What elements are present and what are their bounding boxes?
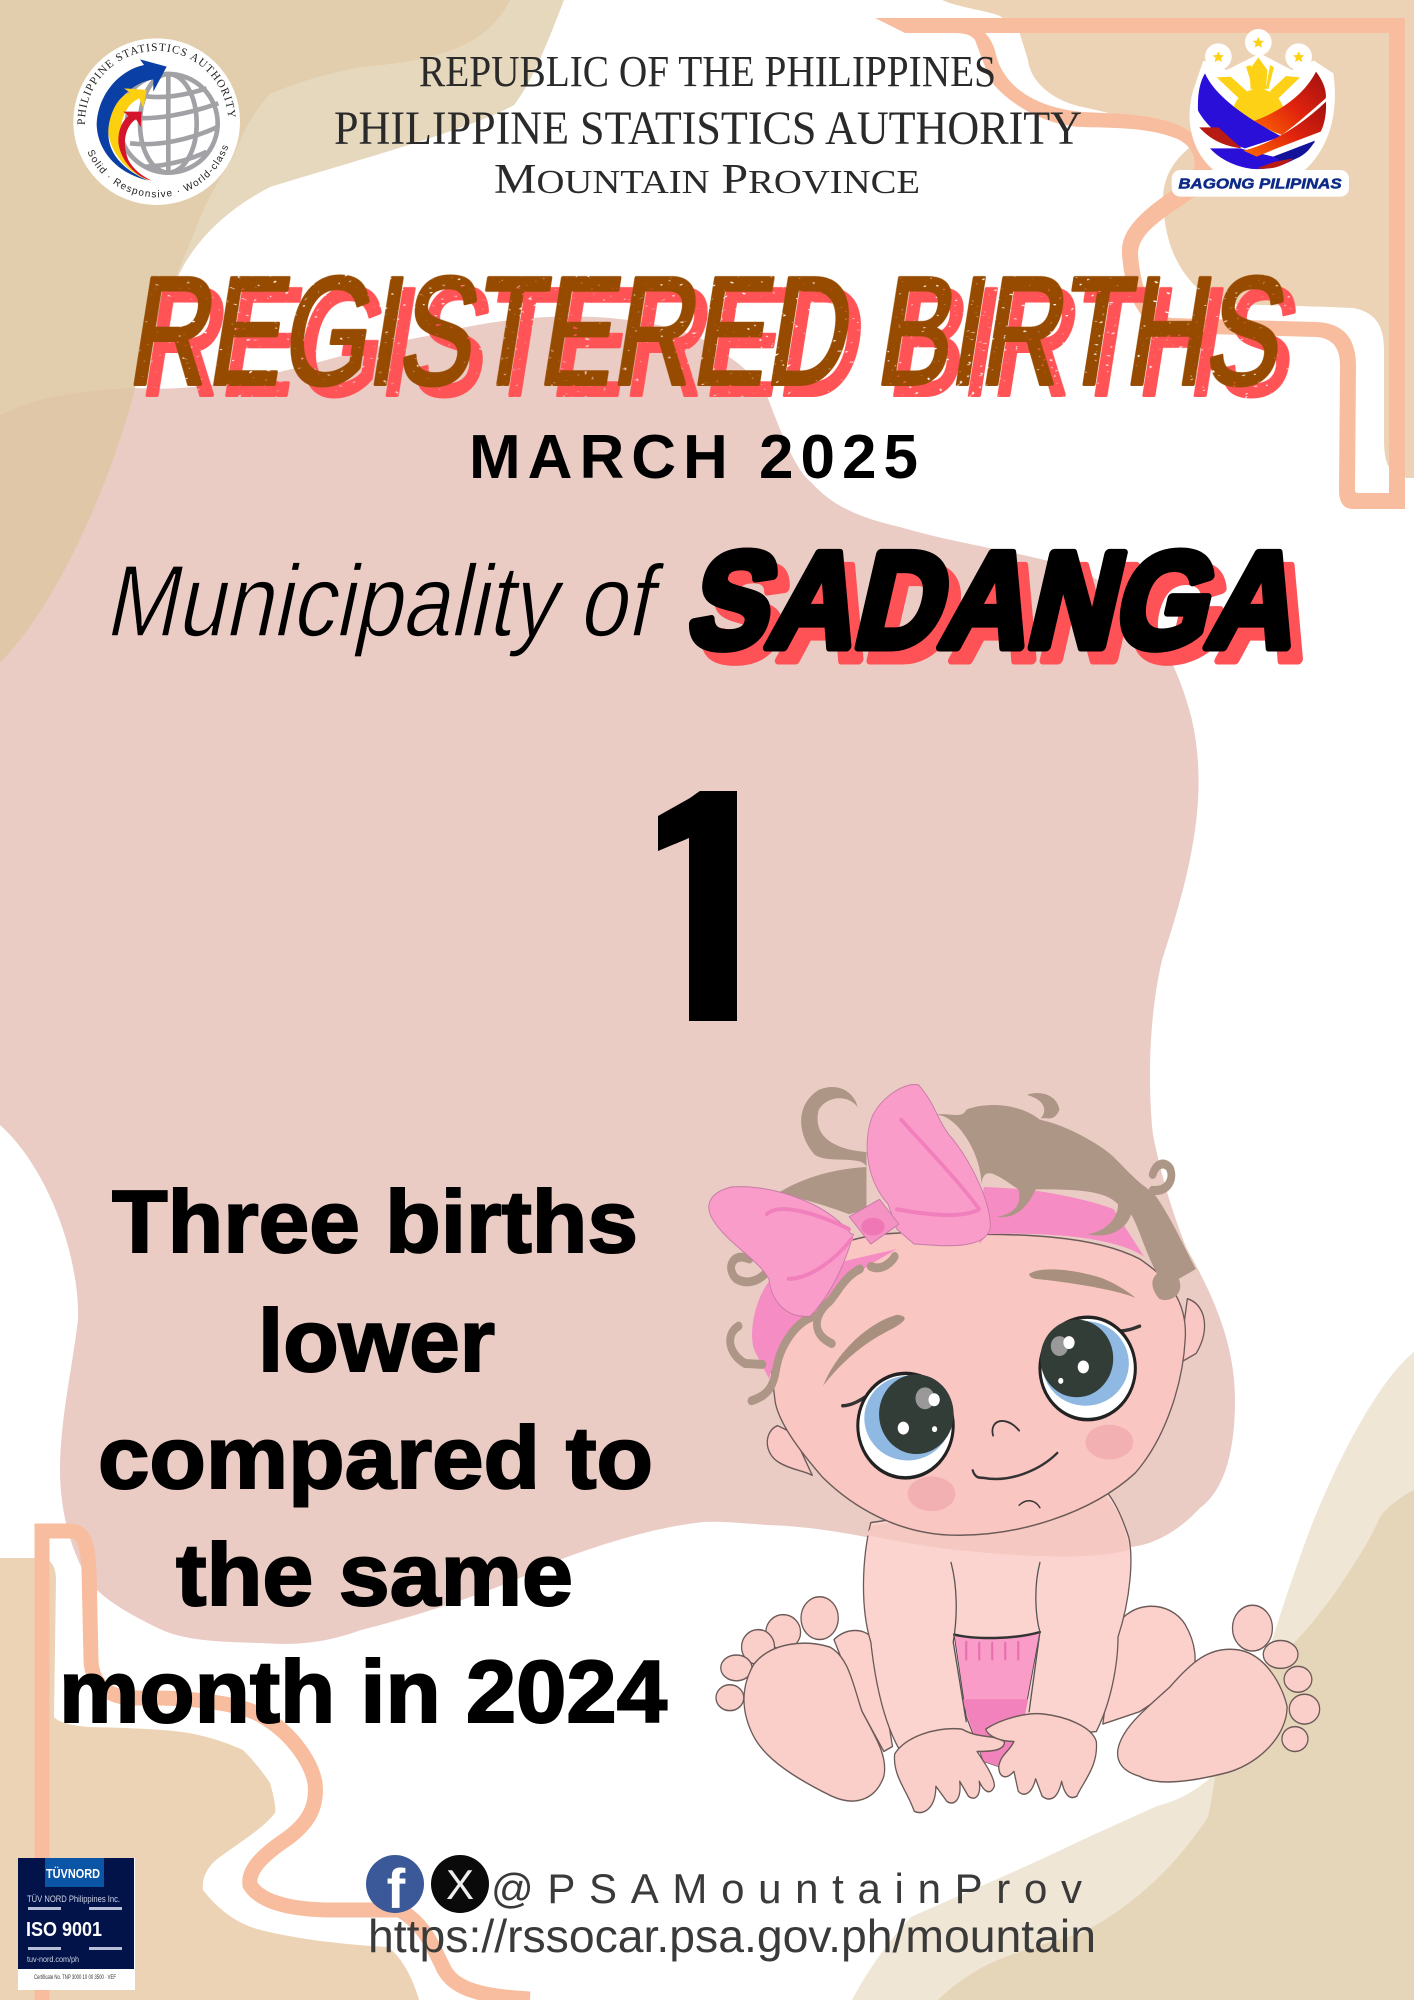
- big number: 1: 1: [594, 636, 802, 1128]
- line 2: lower: [258, 1291, 495, 1390]
- headband: [752, 1187, 1144, 1378]
- social handle: @PSAMountainProv: [491, 1865, 1082, 1912]
- sun: [1232, 89, 1284, 141]
- title: registered births: [121, 245, 1310, 428]
- diaper band: [954, 1632, 1040, 1638]
- line 5: month in 2024: [59, 1642, 667, 1741]
- line 4: the same: [176, 1525, 573, 1624]
- line: top-right orange ribbon: [875, 18, 1405, 509]
- date: March 2025: MARCH 2025: [469, 423, 918, 492]
- head: [770, 1233, 1185, 1535]
- municipality name: Sadanga: [677, 525, 1330, 690]
- blue arrow: [97, 59, 167, 181]
- logo name pill: [1172, 170, 1349, 197]
- header: agency lines: [334, 47, 1082, 203]
- blue ribbon right: [1273, 141, 1315, 163]
- certification badge: ISO 9001: ISO 9001: [26, 1919, 102, 1941]
- line: bottom-left orange ribbon: [42, 1531, 530, 2000]
- left eye: [843, 1373, 954, 1478]
- eyebrows: [823, 1315, 905, 1386]
- shape: bottom-right dark: [938, 1490, 1414, 2000]
- shape: top-right tan: [942, 0, 1414, 478]
- certification badge: ISO 9001: tuv-nord.com/ph: [27, 1955, 79, 1964]
- red arrow: [118, 112, 152, 181]
- right hand: [986, 1714, 1097, 1799]
- certification badge: ISO 9001: [18, 1858, 135, 1990]
- bow: [709, 1085, 990, 1316]
- icon: X: X: [446, 1861, 474, 1908]
- logo: Philippine Statistics Authority: Solid · Responsive · World-class: [88, 145, 228, 198]
- cheeks: [908, 1476, 955, 1511]
- right foot: [1118, 1605, 1320, 1782]
- certification badge: ISO 9001: TÜV NORD Philippines Inc.: [27, 1894, 120, 1904]
- left foot: [716, 1597, 885, 1801]
- red ribbon left: [1199, 127, 1242, 148]
- shape: left lower tan: [0, 388, 135, 663]
- shape: bottom-left tan: [0, 1558, 419, 2000]
- header line 2: PHILIPPINE STATISTICS AUTHORITY: [334, 102, 1082, 155]
- footer: social handle and URL: [366, 1855, 1096, 1962]
- shape: bottom-right light: [852, 1352, 1414, 2000]
- stars: [1213, 37, 1304, 62]
- logo: Bagong Pilipinas: [1172, 29, 1349, 197]
- comparison text: [59, 1172, 667, 1741]
- line 1: Three births: [112, 1172, 638, 1271]
- body shade over blob: [866, 1493, 1129, 1557]
- name shadow: SADANGA: [689, 538, 1330, 690]
- ears: [767, 1299, 1205, 1475]
- back thighs: [834, 1606, 1195, 1751]
- line 3: compared to: [98, 1408, 653, 1507]
- blue ribbon: [1198, 73, 1282, 148]
- hair: [780, 1087, 1196, 1300]
- subtitle: municipality of: Municipality of: [99, 544, 669, 658]
- icon: facebook: f: [387, 1857, 406, 1920]
- logo: Bagong Pilipinas: BAGONG PILIPINAS: [1178, 177, 1342, 193]
- red ribbon bottom: [1257, 158, 1293, 169]
- shape: pink blob: [0, 317, 1235, 1644]
- yellow arrow: [108, 88, 150, 181]
- nose and mouth: [973, 1421, 1057, 1508]
- logo: Philippine Statistics Authority: [73, 38, 240, 205]
- certification badge: ISO 9001: Certificate No. TNP 3000 10 00 3500 · VEF: [34, 1975, 116, 1981]
- globe grid: [119, 74, 218, 173]
- bowl base: [1210, 142, 1315, 169]
- logo ring text: PHILIPPINE STATISTICS AUTHORITY: [77, 43, 236, 125]
- shape: top-left darker tan: [0, 0, 510, 415]
- left hand: [894, 1729, 1004, 1813]
- arm lines: [951, 1562, 1040, 1722]
- red ribbon upper: [1252, 72, 1326, 135]
- red ribbon middle: [1243, 102, 1326, 157]
- body: [863, 1488, 1131, 1749]
- shape: top-left light tan: [0, 0, 564, 663]
- website URL: https://rssocar.psa.gov.ph/mountain: [368, 1910, 1096, 1962]
- right eye: [1040, 1317, 1140, 1420]
- icon: facebook: [366, 1855, 424, 1920]
- illustration: baby: [709, 1085, 1320, 1813]
- header line 3: MOUNTAIN PROVINCE: [494, 157, 920, 203]
- header line 1: REPUBLIC OF THE PHILIPPINES: [419, 47, 996, 96]
- name main: SADANGA: [677, 525, 1318, 677]
- icon: X: [431, 1855, 489, 1913]
- certification badge: ISO 9001: TÜVNORD: [46, 1866, 100, 1881]
- diaper: [954, 1632, 1040, 1767]
